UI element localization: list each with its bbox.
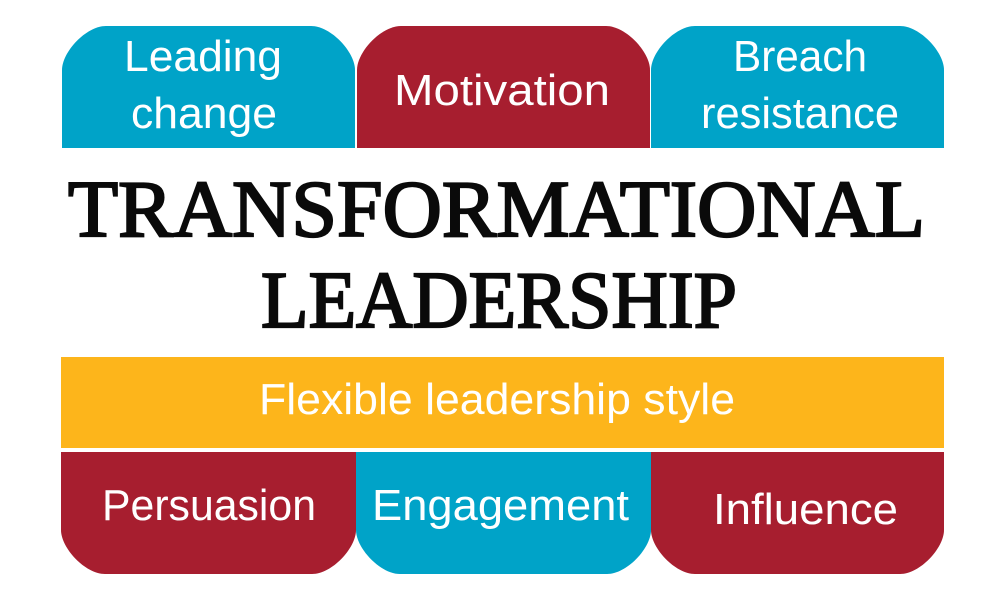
panel: persuasion xyxy=(61,452,356,574)
panel: influence: Influence xyxy=(713,485,898,534)
panel: motivation xyxy=(357,26,650,148)
title: TRANSFORMATIONAL xyxy=(68,166,925,254)
panel: influence xyxy=(651,452,944,574)
banner: flexible leadership style xyxy=(61,357,944,448)
panel: persuasion: Persuasion xyxy=(102,481,316,530)
panel: leading change: Leading xyxy=(124,32,282,81)
panel: engagement: Engagement xyxy=(372,481,629,530)
banner: flexible leadership style: Flexible leadership style xyxy=(259,375,735,424)
title: LEADERSHIP xyxy=(261,257,737,345)
panel: leading change xyxy=(62,26,355,148)
panel: motivation: Motivation xyxy=(394,66,610,115)
panel: engagement xyxy=(356,452,651,574)
title xyxy=(68,166,925,345)
panel: breach resistance xyxy=(651,26,944,148)
panel: breach resistance: Breach xyxy=(733,32,867,81)
panel: leading change: change xyxy=(131,89,277,138)
panel: breach resistance: resistance xyxy=(701,89,899,138)
